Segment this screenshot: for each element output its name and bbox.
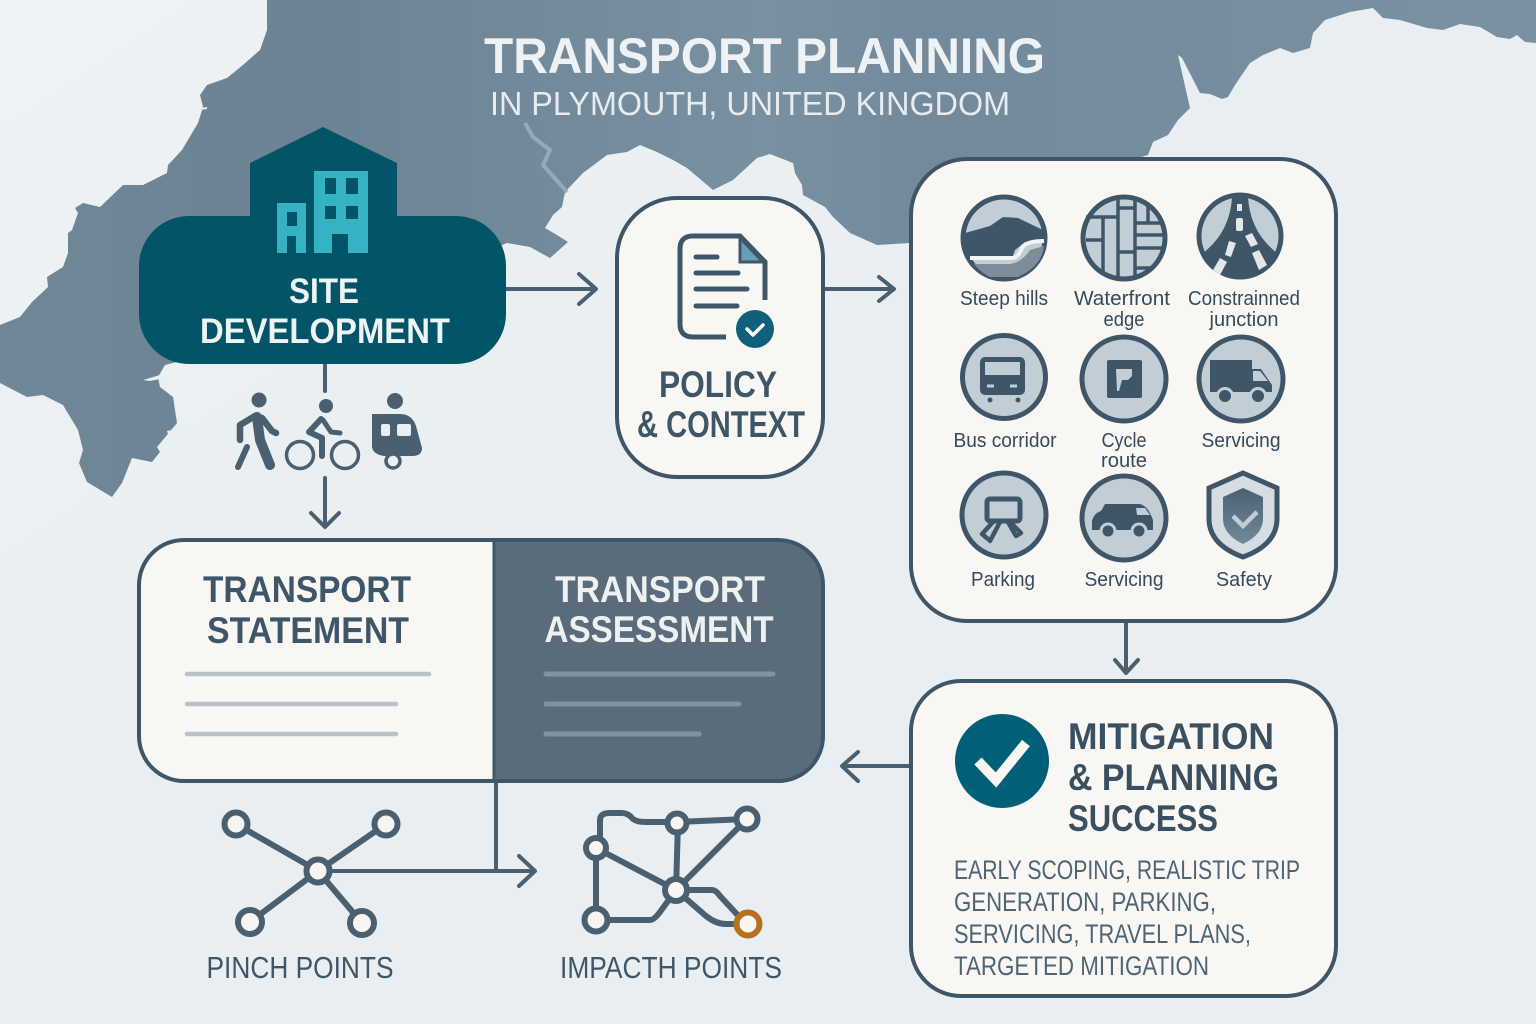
heading: transport statement: TRANSPORT [203,569,411,610]
icon: document with check [680,236,774,348]
text: mitigation details: TARGETED MITIGATION [954,951,1209,981]
labels: row one: Steep hills [960,287,1048,310]
title: TRANSPORT PLANNING [484,28,1045,84]
heading: mitigation [1068,716,1279,839]
heading: transport assessment [544,569,774,650]
text: mitigation details: GENERATION, PARKING, [954,887,1216,917]
labels: row two: Servicing [1202,429,1280,452]
labels: row three [971,568,1273,591]
icon: impact points network [584,808,760,936]
label: pinch points: PINCH POINTS [206,950,394,985]
labels: row one: edge [1104,308,1144,331]
arrow: factors to mitigation [1115,622,1138,673]
map: river inlet [525,123,567,192]
labels: row three: Servicing [1084,568,1164,591]
icon: check badge [955,714,1049,808]
text: mitigation details: EARLY SCOPING, REALISTIC TRIP [954,855,1300,885]
subtitle: IN PLYMOUTH, UNITED KINGDOM [490,85,1010,122]
labels: row one: Waterfront [1074,287,1170,310]
panel: mitigation [911,681,1336,996]
arrow: site down [323,365,327,391]
icon: safety shield [1209,473,1277,557]
text: mitigation details [954,855,1300,981]
heading: mitigation: SUCCESS [1068,798,1218,839]
panel: site development: DEVELOPMENT [200,312,450,351]
icon: cyclist [286,399,358,468]
arrow: assessment to points [318,782,535,886]
text lines: assessment [546,674,773,734]
labels: row three: Parking [971,568,1035,591]
labels: row one: Constrainned [1188,287,1300,310]
icon: buildings [277,171,368,253]
heading: transport assessment: ASSESSMENT [544,609,774,650]
icon: pinch points network [224,812,398,935]
icon: street grid [1083,197,1165,279]
heading: mitigation: MITIGATION [1068,716,1274,757]
heading: transport assessment: TRANSPORT [555,569,765,610]
labels: row two: Cycle [1102,429,1146,452]
labels: row two [954,429,1280,472]
labels: row three: Safety [1216,568,1273,591]
icon: constrained junction [1199,195,1281,277]
icon: parking [962,473,1046,557]
heading: site development: SITE [289,272,359,311]
labels: row two: route [1101,449,1147,472]
icon: steep hills [963,197,1045,279]
connectors [311,274,1138,886]
icon: cycle route [1082,337,1166,421]
icon: bus corridor [962,336,1046,418]
arrow: site to policy [506,274,596,304]
heading: transport statement: STATEMENT [207,610,409,651]
panel: policy and context [617,198,823,477]
panel: local factors [911,159,1336,621]
map: small estuaries [143,107,207,434]
icon: pedestrian [238,392,276,467]
text lines: statement [187,674,429,734]
label: impact points: IMPACTH POINTS [560,950,782,985]
heading: transport statement [203,569,411,651]
text: mitigation details: SERVICING, TRAVEL PLANS, [954,919,1251,949]
icons: travel modes [238,392,422,468]
labels: row two: Bus corridor [954,429,1057,452]
labels: row one: junction [1209,308,1278,331]
labels: row one [960,287,1300,331]
panel: policy and context: & CONTEXT [637,404,805,445]
icon: bus with person [372,393,422,468]
arrow: modes to statement [311,478,339,527]
map: south-west coastline [0,0,1536,497]
arrow: policy to factors [824,277,894,301]
panel: site development [139,127,506,364]
heading: policy and context: POLICY [659,364,777,405]
icon: servicing truck [1199,337,1283,421]
panel: statement and assessment [139,540,823,781]
arrow: mitigation to statement [842,752,910,781]
heading: mitigation: & PLANNING [1068,757,1279,798]
icon: servicing van [1082,476,1166,560]
